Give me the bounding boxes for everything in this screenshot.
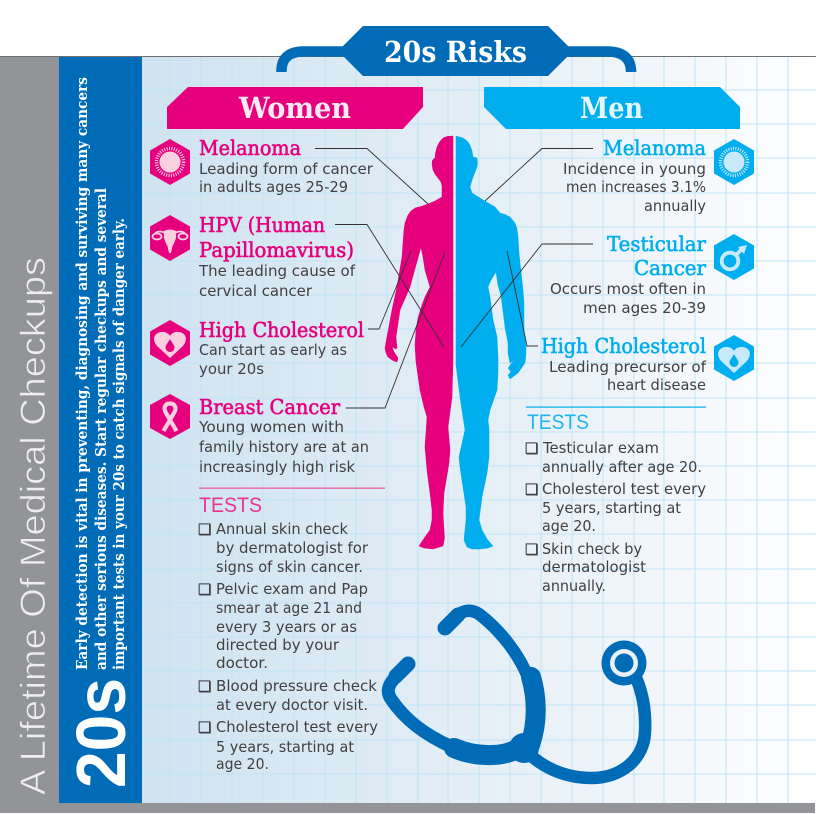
- test: skin check: Annual skin check: [216, 520, 348, 538]
- icon: heart with drop, men: [714, 335, 754, 381]
- icon: stethoscope: [388, 611, 646, 778]
- women: melanoma text: [199, 136, 374, 196]
- test: cholesterol: ❑: [525, 480, 538, 498]
- test: cholesterol: Cholesterol test every: [216, 718, 378, 736]
- test: skin check: [525, 540, 646, 595]
- test: cholesterol: age 20.: [216, 755, 269, 773]
- women: high cholesterol text: [199, 318, 364, 378]
- women: breast cancer text: [198, 395, 369, 476]
- women: HPV text: [198, 213, 356, 300]
- grid background panel: [142, 57, 816, 803]
- women: HPV text: The leading cause of: [198, 262, 356, 280]
- women: breast cancer text: Young women with: [198, 418, 344, 436]
- body silhouette: male half: [456, 136, 526, 549]
- test: skin check: dermatologist: [542, 558, 646, 576]
- test: skin check: ❑: [525, 540, 538, 558]
- test: skin check: ❑: [198, 520, 211, 538]
- men: testicular cancer text: Occurs most often in: [550, 280, 706, 298]
- women: breast cancer text: Breast Cancer: [199, 395, 340, 419]
- women: HPV text: cervical cancer: [199, 282, 313, 300]
- test: cholesterol: age 20.: [542, 517, 596, 535]
- women heading: Women: [238, 91, 351, 125]
- men: tests list: [525, 406, 706, 595]
- women: HPV text: Papillomavirus): [199, 238, 354, 262]
- men: high cholesterol text: [541, 334, 707, 394]
- intro paragraph: [74, 77, 128, 670]
- test: blood pressure: ❑: [198, 678, 211, 696]
- body silhouette: female half: [385, 136, 453, 549]
- men: testicular cancer text: Cancer: [634, 256, 706, 280]
- icon: male symbol: [714, 234, 754, 280]
- women: breast cancer text: family history are at an: [199, 438, 369, 456]
- icon: ribbon: [150, 394, 190, 439]
- test: testicular exam: [525, 439, 702, 476]
- women: breast cancer text: increasingly high risk: [199, 458, 355, 476]
- test: skin check: annually.: [542, 577, 606, 595]
- men heading: Men: [580, 91, 643, 125]
- intro paragraph: and other serious diseases. Start regular checkups and several: [93, 188, 110, 670]
- test: cholesterol: [525, 480, 706, 535]
- men: high cholesterol text: Leading precursor of: [549, 358, 707, 376]
- title banner: [282, 26, 631, 76]
- test: skin check: Skin check by: [542, 540, 642, 558]
- test: cholesterol: ❑: [198, 718, 211, 736]
- test: cholesterol: 5 years, starting at: [542, 499, 681, 517]
- men: testicular cancer text: Testicular: [607, 232, 706, 256]
- men: melanoma text: Incidence in young: [563, 160, 706, 178]
- test: cholesterol: [198, 718, 378, 773]
- icon: uterus: [150, 215, 190, 261]
- intro paragraph: Early detection is vital in preventing, diagnosing and surviving many cancers: [74, 77, 91, 670]
- age label 20s: 20s: [62, 678, 140, 788]
- women: tests list: TESTS: [199, 494, 262, 517]
- leader lines: [315, 148, 593, 408]
- women: tests list: [198, 488, 385, 773]
- men: testicular cancer text: [550, 232, 706, 317]
- women: high cholesterol text: Can start as early as: [199, 341, 347, 359]
- icon: sun, women: [150, 139, 190, 185]
- test: pelvic exam: [198, 580, 368, 672]
- men: melanoma text: annually: [644, 197, 706, 215]
- icon: sun, men: [714, 139, 754, 185]
- men: melanoma text: men increases 3.1%: [566, 178, 706, 196]
- test: testicular exam: ❑: [525, 440, 538, 458]
- test: skin check: signs of skin cancer.: [216, 558, 363, 576]
- test: skin check: [198, 520, 369, 576]
- men: high cholesterol text: High Cholesterol: [541, 334, 706, 358]
- icon: heart with drop, women: [150, 320, 190, 366]
- test: skin check: by dermatologist for: [216, 539, 369, 557]
- intro paragraph: important tests in your 20s to catch signals of danger early.: [111, 218, 128, 670]
- men heading: [484, 87, 740, 129]
- blue sidebar with age and intro: [59, 57, 142, 803]
- test: pelvic exam: doctor.: [216, 654, 268, 672]
- women heading: [167, 87, 423, 129]
- women: HPV text: HPV (Human: [199, 213, 325, 237]
- test: pelvic exam: directed by your: [216, 636, 340, 654]
- test: blood pressure: [198, 677, 377, 714]
- test: blood pressure: Blood pressure check: [216, 677, 377, 695]
- men: testicular cancer text: men ages 20-39: [583, 299, 706, 317]
- men: tests list: TESTS: [527, 411, 589, 434]
- women: melanoma text: in adults ages 25-29: [199, 178, 348, 196]
- test: cholesterol: Cholesterol test every: [542, 480, 706, 498]
- test: testicular exam: annually after age 20.: [542, 458, 702, 476]
- women: high cholesterol text: High Cholesterol: [199, 318, 364, 342]
- test: cholesterol: 5 years, starting at: [216, 738, 354, 756]
- test: testicular exam: Testicular exam: [542, 439, 659, 457]
- grey sidebar with series title: A Lifetime Of Medical Checkups: [14, 257, 53, 795]
- test: blood pressure: at every doctor visit.: [216, 696, 368, 714]
- test: pelvic exam: ❑: [198, 580, 211, 598]
- test: pelvic exam: Pelvic exam and Pap: [216, 580, 368, 598]
- men: melanoma text: Melanoma: [603, 136, 706, 160]
- test: pelvic exam: smear at age 21 and: [216, 599, 362, 617]
- women: melanoma text: Melanoma: [199, 136, 301, 160]
- men: melanoma text: [563, 136, 706, 215]
- men: high cholesterol text: heart disease: [607, 376, 706, 394]
- test: pelvic exam: every 3 years or as: [216, 618, 357, 636]
- women: melanoma text: Leading form of cancer: [199, 160, 374, 178]
- women: high cholesterol text: your 20s: [199, 360, 264, 378]
- title banner: 20s Risks: [384, 35, 527, 69]
